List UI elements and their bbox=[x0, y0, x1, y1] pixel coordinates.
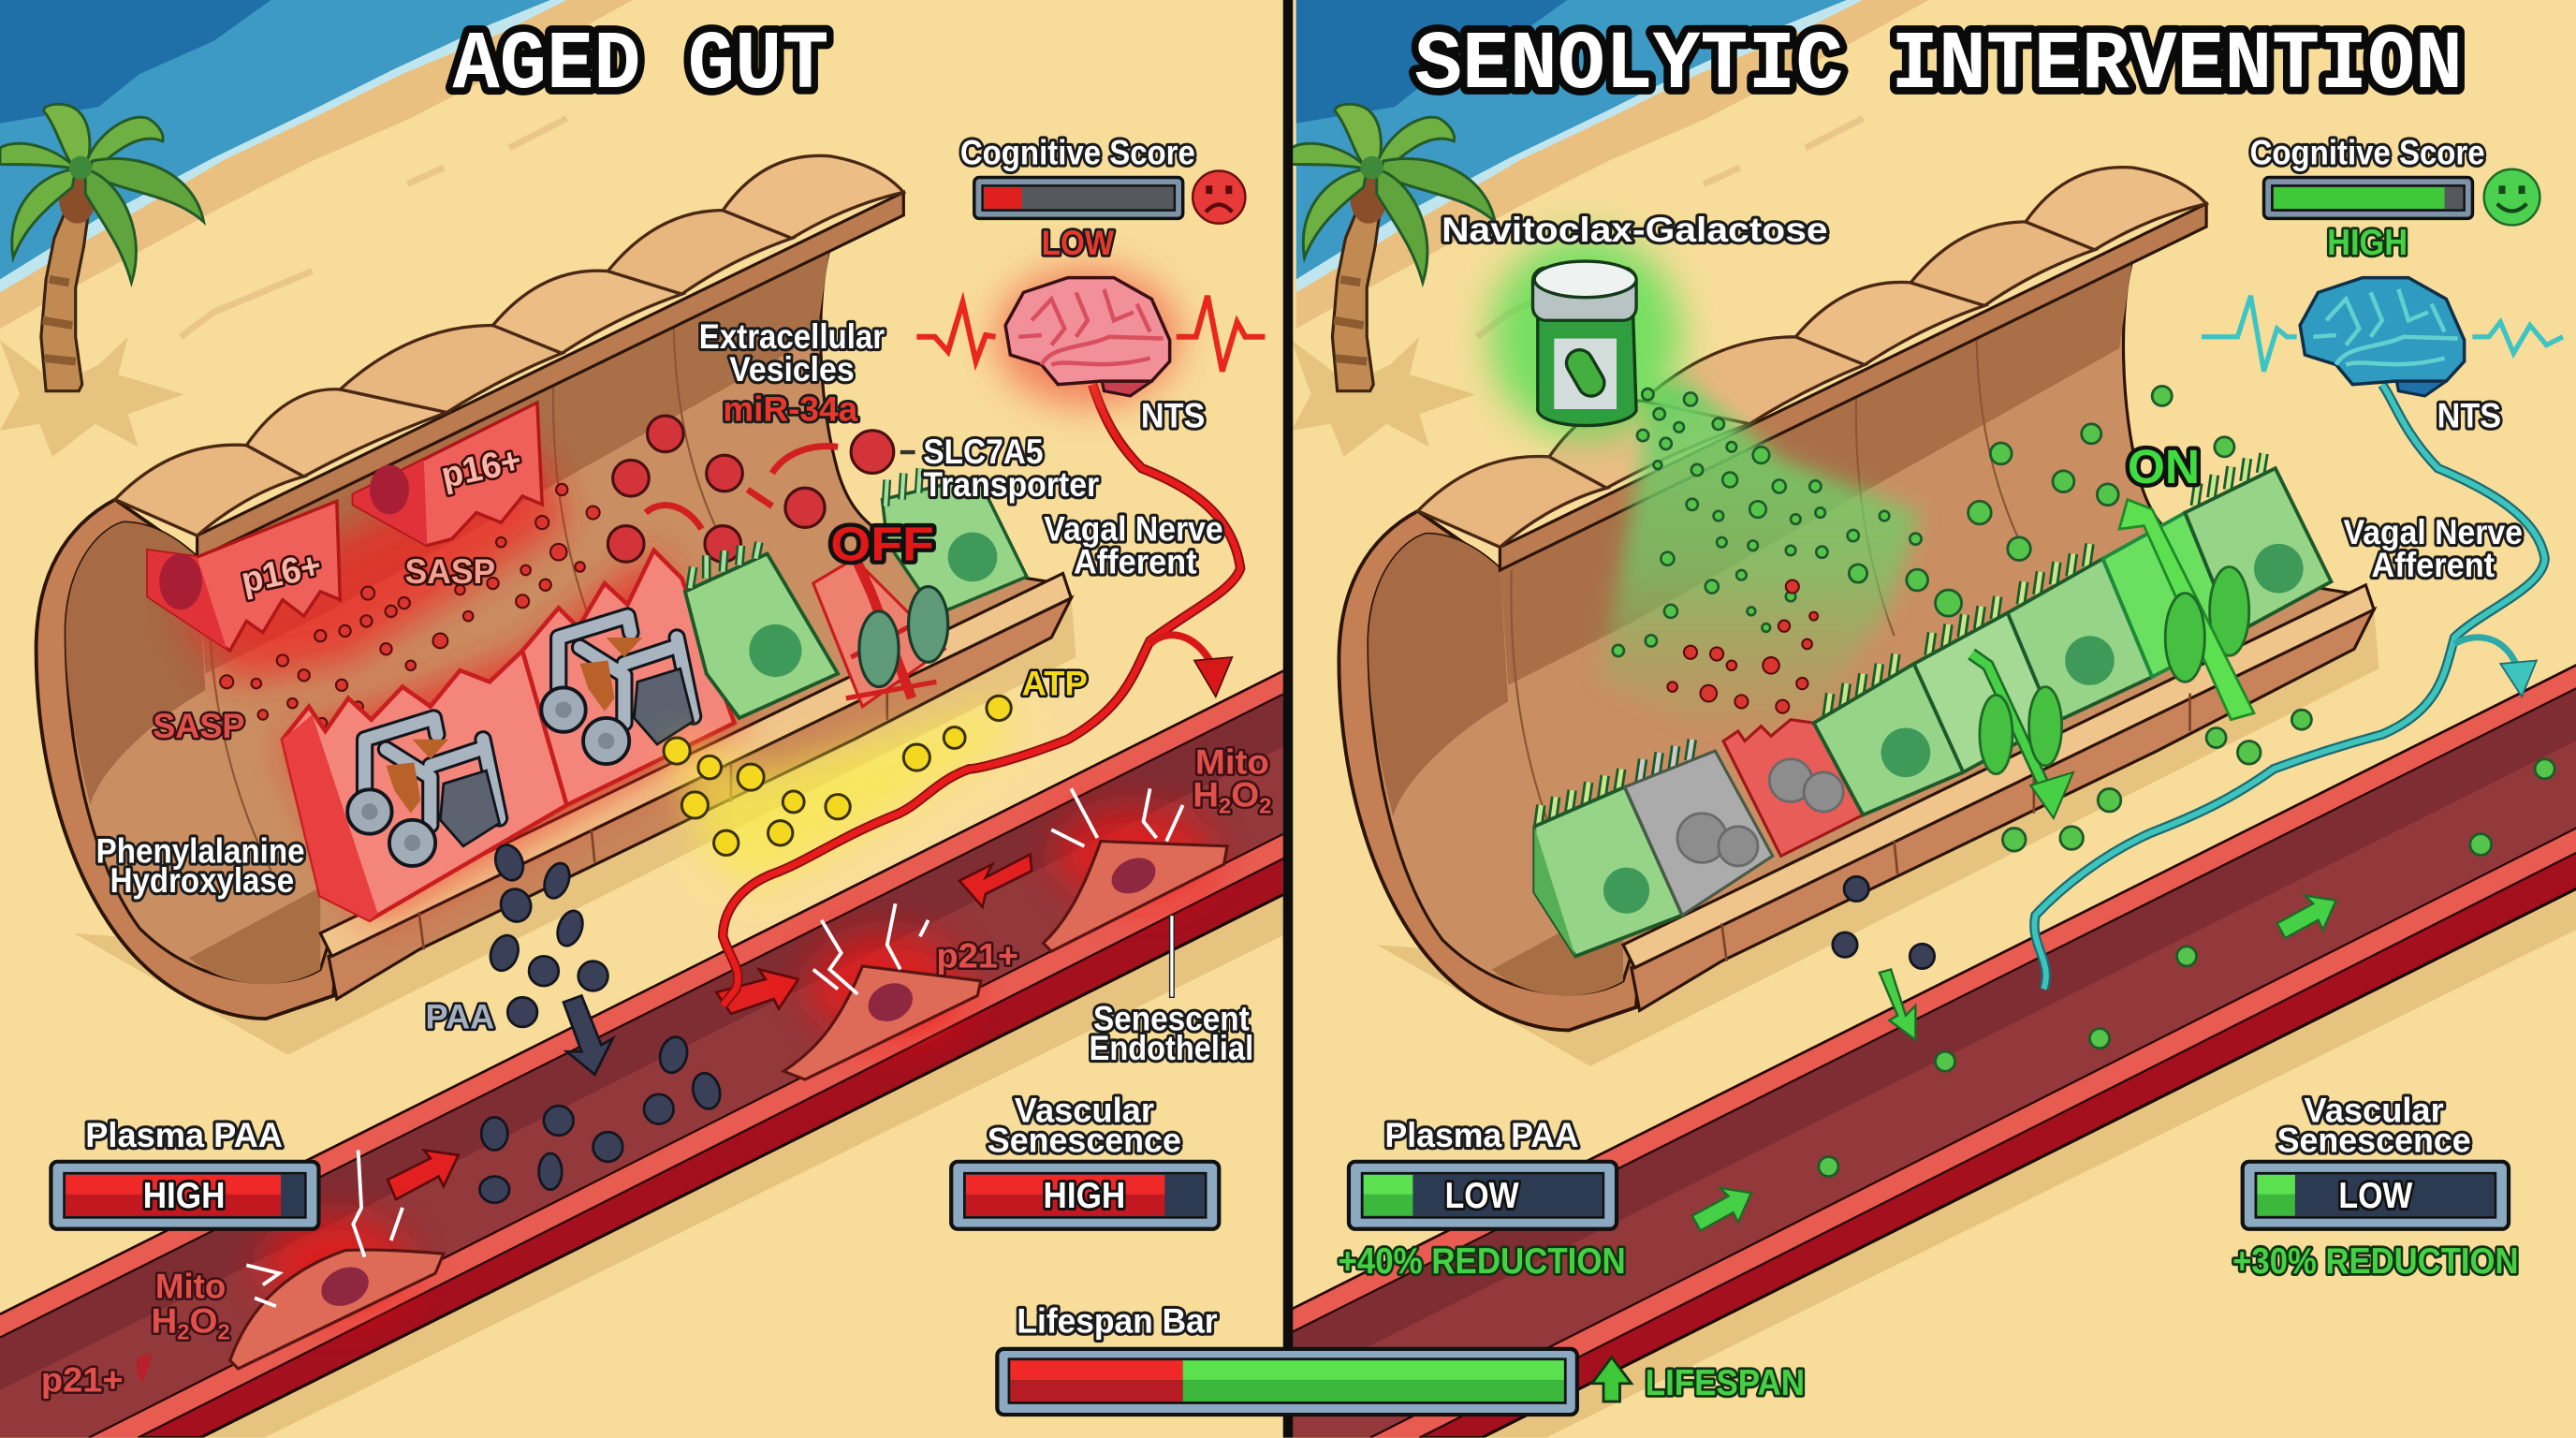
endothelial cell right bbox=[1043, 842, 1227, 951]
labels left: Cognitive Score bbox=[960, 134, 1195, 172]
nerve right bbox=[2034, 385, 2545, 990]
sparks bbox=[246, 788, 1183, 1306]
labels right: HIGH bbox=[2327, 223, 2408, 263]
icon: machine gears upper bbox=[541, 616, 694, 764]
labels left: OFF bbox=[830, 517, 934, 570]
active transporter upper bbox=[2119, 500, 2254, 720]
SLC7A5 marker dash bbox=[900, 450, 915, 454]
labels left: Extracellular bbox=[699, 317, 885, 356]
labels left: 2 bbox=[177, 1319, 190, 1343]
labels left: NTS bbox=[1141, 396, 1205, 434]
labels left: Senescent bbox=[1093, 999, 1250, 1037]
labels left: Plasma PAA bbox=[85, 1116, 283, 1154]
labels left bbox=[41, 134, 1271, 1400]
beach sea left bbox=[0, 0, 633, 337]
labels left: SLC7A5 bbox=[923, 433, 1043, 471]
icon: brain blue bbox=[2300, 278, 2465, 396]
labels left: ATP bbox=[1022, 664, 1088, 702]
labels left: Afferent bbox=[1074, 543, 1197, 581]
labels right: NTS bbox=[2437, 396, 2501, 434]
vascular senescence high bar bbox=[951, 1162, 1219, 1229]
labels right bbox=[1339, 134, 2523, 1282]
icon: sad face bbox=[1193, 171, 1245, 224]
healthy green cell back bbox=[882, 468, 1027, 614]
labels left: HIGH bbox=[1043, 1176, 1125, 1216]
SASP particles left bbox=[220, 484, 600, 727]
brain pulse left bbox=[2202, 296, 2297, 372]
labels left: SASP bbox=[405, 552, 495, 591]
drug particles cloud bbox=[1613, 389, 1922, 656]
red glow of senescent cells bbox=[181, 440, 739, 920]
labels right: Cognitive Score bbox=[2250, 134, 2485, 172]
cognitive score gauge left bbox=[974, 178, 1183, 218]
labels right: +30% REDUCTION bbox=[2232, 1241, 2519, 1282]
labels left: p16+ bbox=[238, 545, 325, 601]
title senolytic intervention: SENOLYTIC INTERVENTION bbox=[1414, 20, 2463, 112]
icon: brain red bbox=[1005, 278, 1170, 396]
labels left: Phenylalanine bbox=[96, 831, 305, 870]
labels right: Vagal Nerve bbox=[2344, 513, 2523, 551]
lifespan bar: Lifespan Bar bbox=[1017, 1301, 1218, 1340]
ATP glow bbox=[674, 707, 1018, 888]
icon: machine gears lower bbox=[347, 718, 500, 866]
icon: happy face bbox=[2484, 169, 2539, 225]
off cell red bbox=[813, 559, 944, 707]
PAA molecules bbox=[479, 841, 724, 1203]
labels left: HIGH bbox=[143, 1176, 225, 1216]
plasma PAA low bar bbox=[1349, 1162, 1617, 1229]
endothelial cell middle bbox=[783, 966, 981, 1079]
white marker line bbox=[1170, 916, 1174, 997]
red cell glows in vessel bbox=[263, 808, 1212, 1314]
extracellular vesicles bbox=[607, 416, 894, 562]
PAA remaining bbox=[1833, 876, 1935, 969]
larger drug particles bbox=[1819, 386, 2554, 1177]
gut tube left bbox=[37, 155, 1076, 1055]
labels right: Afferent bbox=[2371, 546, 2495, 584]
labels left: PAA bbox=[426, 998, 494, 1036]
labels left: Senescence bbox=[988, 1121, 1181, 1159]
arrows between vesicles bbox=[646, 447, 838, 529]
beach sea right bbox=[1296, 0, 1928, 337]
vascular senescence low bar bbox=[2243, 1162, 2509, 1229]
labels left: 2 bbox=[1219, 794, 1231, 818]
swollen cell 1 bbox=[283, 651, 567, 920]
icon: Navitoclax bottle bbox=[1533, 261, 1636, 426]
labels left: H bbox=[1193, 776, 1218, 814]
labels left: LOW bbox=[1042, 224, 1114, 262]
healthy green cell front bbox=[685, 542, 838, 718]
arrow: lifespan up bbox=[1592, 1357, 1632, 1401]
labels left: Vascular bbox=[1015, 1092, 1154, 1130]
bottle glow bbox=[1490, 235, 1680, 439]
labels left: 2 bbox=[1259, 794, 1271, 818]
green flow arrows bbox=[1692, 895, 2336, 1231]
label lifespan: LIFESPAN bbox=[1646, 1363, 1805, 1403]
senescent cell p16 upper bbox=[353, 403, 542, 546]
labels left: Mito bbox=[155, 1267, 226, 1305]
labels left: p16+ bbox=[438, 440, 525, 496]
senescent cell p16 lower bbox=[148, 501, 340, 651]
panel: aged gut bbox=[0, 0, 1314, 1438]
blood vessel right bbox=[1281, 655, 2576, 1438]
gut tube right bbox=[1339, 168, 2378, 1066]
nerve arrowhead right bbox=[2500, 661, 2537, 697]
labels left: 2 bbox=[217, 1319, 230, 1343]
blood vessel left bbox=[0, 655, 1314, 1438]
labels right: Plasma PAA bbox=[1385, 1116, 1579, 1154]
icon: palm tree left bbox=[0, 104, 204, 457]
ATP particles bbox=[664, 696, 1011, 855]
labels left: Mito bbox=[1195, 743, 1269, 782]
labels left: p21+ bbox=[41, 1361, 124, 1400]
labels left: Vagal Nerve bbox=[1044, 509, 1223, 548]
nerve arrowhead bbox=[1194, 657, 1232, 697]
heart line right bbox=[1177, 296, 1265, 372]
panel: senolytic intervention bbox=[1281, 0, 2576, 1438]
red flow arrows bbox=[388, 855, 1032, 1199]
labels right: ON bbox=[2128, 440, 2200, 493]
title aged gut: AGED GUT bbox=[453, 20, 828, 112]
labels right: Navitoclax-Galactose bbox=[1442, 211, 1828, 249]
labels left: SASP bbox=[153, 707, 245, 745]
brain pulse right bbox=[2472, 322, 2563, 353]
labels right: LOW bbox=[2338, 1176, 2413, 1216]
labels right: LOW bbox=[1445, 1176, 1519, 1216]
labels left: O bbox=[1231, 776, 1259, 814]
green drug cloud bbox=[1600, 385, 1921, 723]
panel divider bbox=[1283, 0, 1293, 1438]
endothelial cell lower left bbox=[230, 1250, 444, 1369]
labels left: H bbox=[151, 1301, 176, 1340]
labels left: miR-34a bbox=[723, 389, 858, 428]
labels left: Hydroxylase bbox=[110, 861, 294, 900]
plasma PAA high bar bbox=[51, 1162, 318, 1229]
labels left: Vesicles bbox=[729, 350, 855, 389]
swollen cell 2 bbox=[522, 550, 735, 805]
labels left: Endothelial bbox=[1090, 1029, 1253, 1067]
labels left: O bbox=[190, 1301, 217, 1340]
labels left: Transporter bbox=[923, 465, 1099, 504]
labels right: +40% REDUCTION bbox=[1339, 1241, 1626, 1282]
lifespan bar bbox=[997, 1301, 1577, 1415]
labels right: Senescence bbox=[2277, 1121, 2471, 1159]
arrow: PAA into blood bbox=[564, 996, 613, 1075]
nerve left bbox=[723, 385, 1240, 1005]
epithelial band bbox=[1534, 453, 2331, 956]
labels right: Vascular bbox=[2305, 1092, 2444, 1130]
brain glow bbox=[996, 268, 1179, 405]
icon: palm tree right bbox=[1292, 104, 1495, 457]
remaining red particles bbox=[1667, 580, 1818, 713]
inactive transporter bbox=[846, 555, 948, 698]
labels left: p21+ bbox=[936, 937, 1018, 976]
small red splat bbox=[137, 1354, 151, 1384]
heart line left bbox=[916, 302, 996, 361]
cognitive score gauge right bbox=[2264, 178, 2472, 218]
active transporter lower bbox=[1971, 654, 2073, 818]
